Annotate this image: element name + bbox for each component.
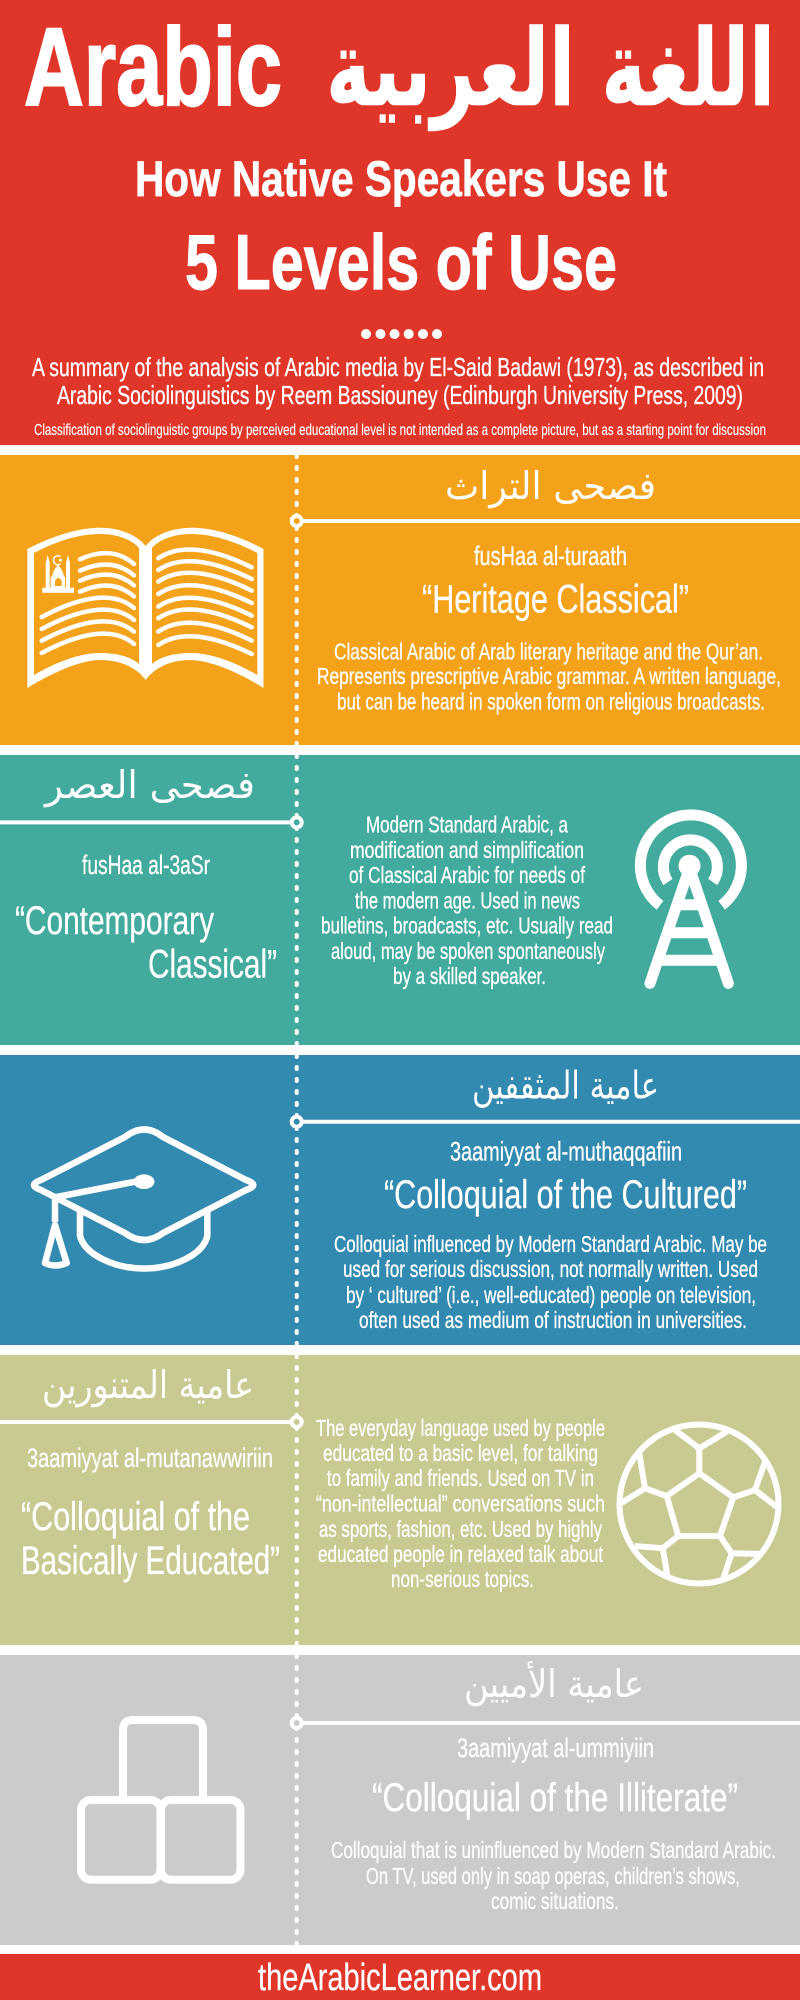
summary text bbox=[32, 352, 764, 410]
panel: colloquial of the basically educated bbox=[0, 1355, 800, 1645]
arabic heading: عامية المتنورين bbox=[42, 1363, 254, 1408]
english name: Basically Educated” bbox=[21, 1539, 280, 1583]
panel: contemporary classical bbox=[0, 755, 800, 1045]
english name: “Contemporary bbox=[15, 899, 214, 943]
heading: 5 levels: 5 Levels of Use bbox=[185, 218, 617, 306]
description: comic situations. bbox=[491, 1888, 619, 1914]
arabic heading: فصحى العصر bbox=[43, 763, 255, 808]
panel: colloquial of the illiterate bbox=[0, 1655, 800, 1945]
dots divider bbox=[361, 329, 442, 339]
connector: colloquial of the basically educated bbox=[0, 1417, 302, 1427]
description: modification and simplification bbox=[350, 837, 584, 863]
transliteration: 3aamiyyat al-mutanawwiriin bbox=[27, 1443, 273, 1473]
footer website: theArabicLearner.com bbox=[258, 1957, 542, 1999]
description: “non-intellectual” conversations such bbox=[316, 1490, 605, 1516]
english name bbox=[21, 1495, 280, 1583]
description: non-serious topics. bbox=[391, 1566, 534, 1592]
icon: soccer ball bbox=[620, 1424, 778, 1584]
connector: colloquial of the illiterate bbox=[292, 1718, 800, 1728]
description bbox=[317, 638, 781, 714]
connector: heritage classical bbox=[292, 516, 800, 526]
description: Modern Standard Arabic, a bbox=[366, 812, 568, 838]
connector: contemporary classical bbox=[0, 817, 302, 827]
title: Arabic: Arabic bbox=[24, 6, 282, 129]
description: the modern age. Used in news bbox=[355, 888, 580, 914]
footer bbox=[0, 1954, 800, 2000]
panel: header bbox=[0, 0, 800, 445]
transliteration: 3aamiyyat al-muthaqqafiin bbox=[450, 1136, 682, 1166]
connector: colloquial of the cultured bbox=[292, 1117, 800, 1127]
description: by a skilled speaker. bbox=[393, 963, 546, 989]
icon: stacked blocks bbox=[81, 1720, 240, 1880]
arabic heading: فصحى التراث bbox=[445, 464, 656, 509]
transliteration: fusHaa al-turaath bbox=[474, 541, 627, 571]
panel: colloquial of the cultured bbox=[0, 1055, 800, 1345]
transliteration: 3aamiyyat al-ummiyiin bbox=[457, 1733, 654, 1763]
english name: “Heritage Classical” bbox=[422, 578, 689, 622]
icon: broadcast tower bbox=[640, 815, 741, 983]
timeline: dotted vertical line bbox=[295, 455, 299, 1945]
english name: Classical” bbox=[148, 942, 277, 986]
icon: graduation cap bbox=[34, 1130, 253, 1268]
panel: heritage classical bbox=[0, 455, 800, 745]
description bbox=[316, 1415, 605, 1592]
subtitle: How Native Speakers Use It bbox=[135, 151, 667, 207]
icon: open book with mosque bbox=[27, 528, 263, 688]
english name bbox=[15, 899, 277, 986]
description bbox=[331, 1837, 776, 1914]
arabic heading: عامية المثقفين bbox=[472, 1064, 659, 1108]
description: as sports, fashion, etc. Used by highly bbox=[319, 1516, 602, 1542]
arabic heading: عامية الأميين bbox=[464, 1660, 644, 1707]
description: to family and friends. Used on TV in bbox=[327, 1465, 594, 1491]
transliteration: fusHaa al-3aSr bbox=[82, 850, 210, 880]
mosque bbox=[42, 555, 74, 593]
description bbox=[334, 1231, 767, 1333]
description: bulletins, broadcasts, etc. Usually read bbox=[321, 912, 613, 938]
description: educated to a basic level, for talking bbox=[323, 1440, 598, 1466]
english name: “Colloquial of the bbox=[21, 1495, 250, 1539]
description: The everyday language used by people bbox=[316, 1415, 605, 1441]
description bbox=[321, 812, 613, 989]
description: educated people in relaxed talk about bbox=[318, 1541, 603, 1567]
description: of Classical Arabic for needs of bbox=[349, 862, 585, 888]
description: aloud, may be spoken spontaneously bbox=[331, 938, 605, 964]
